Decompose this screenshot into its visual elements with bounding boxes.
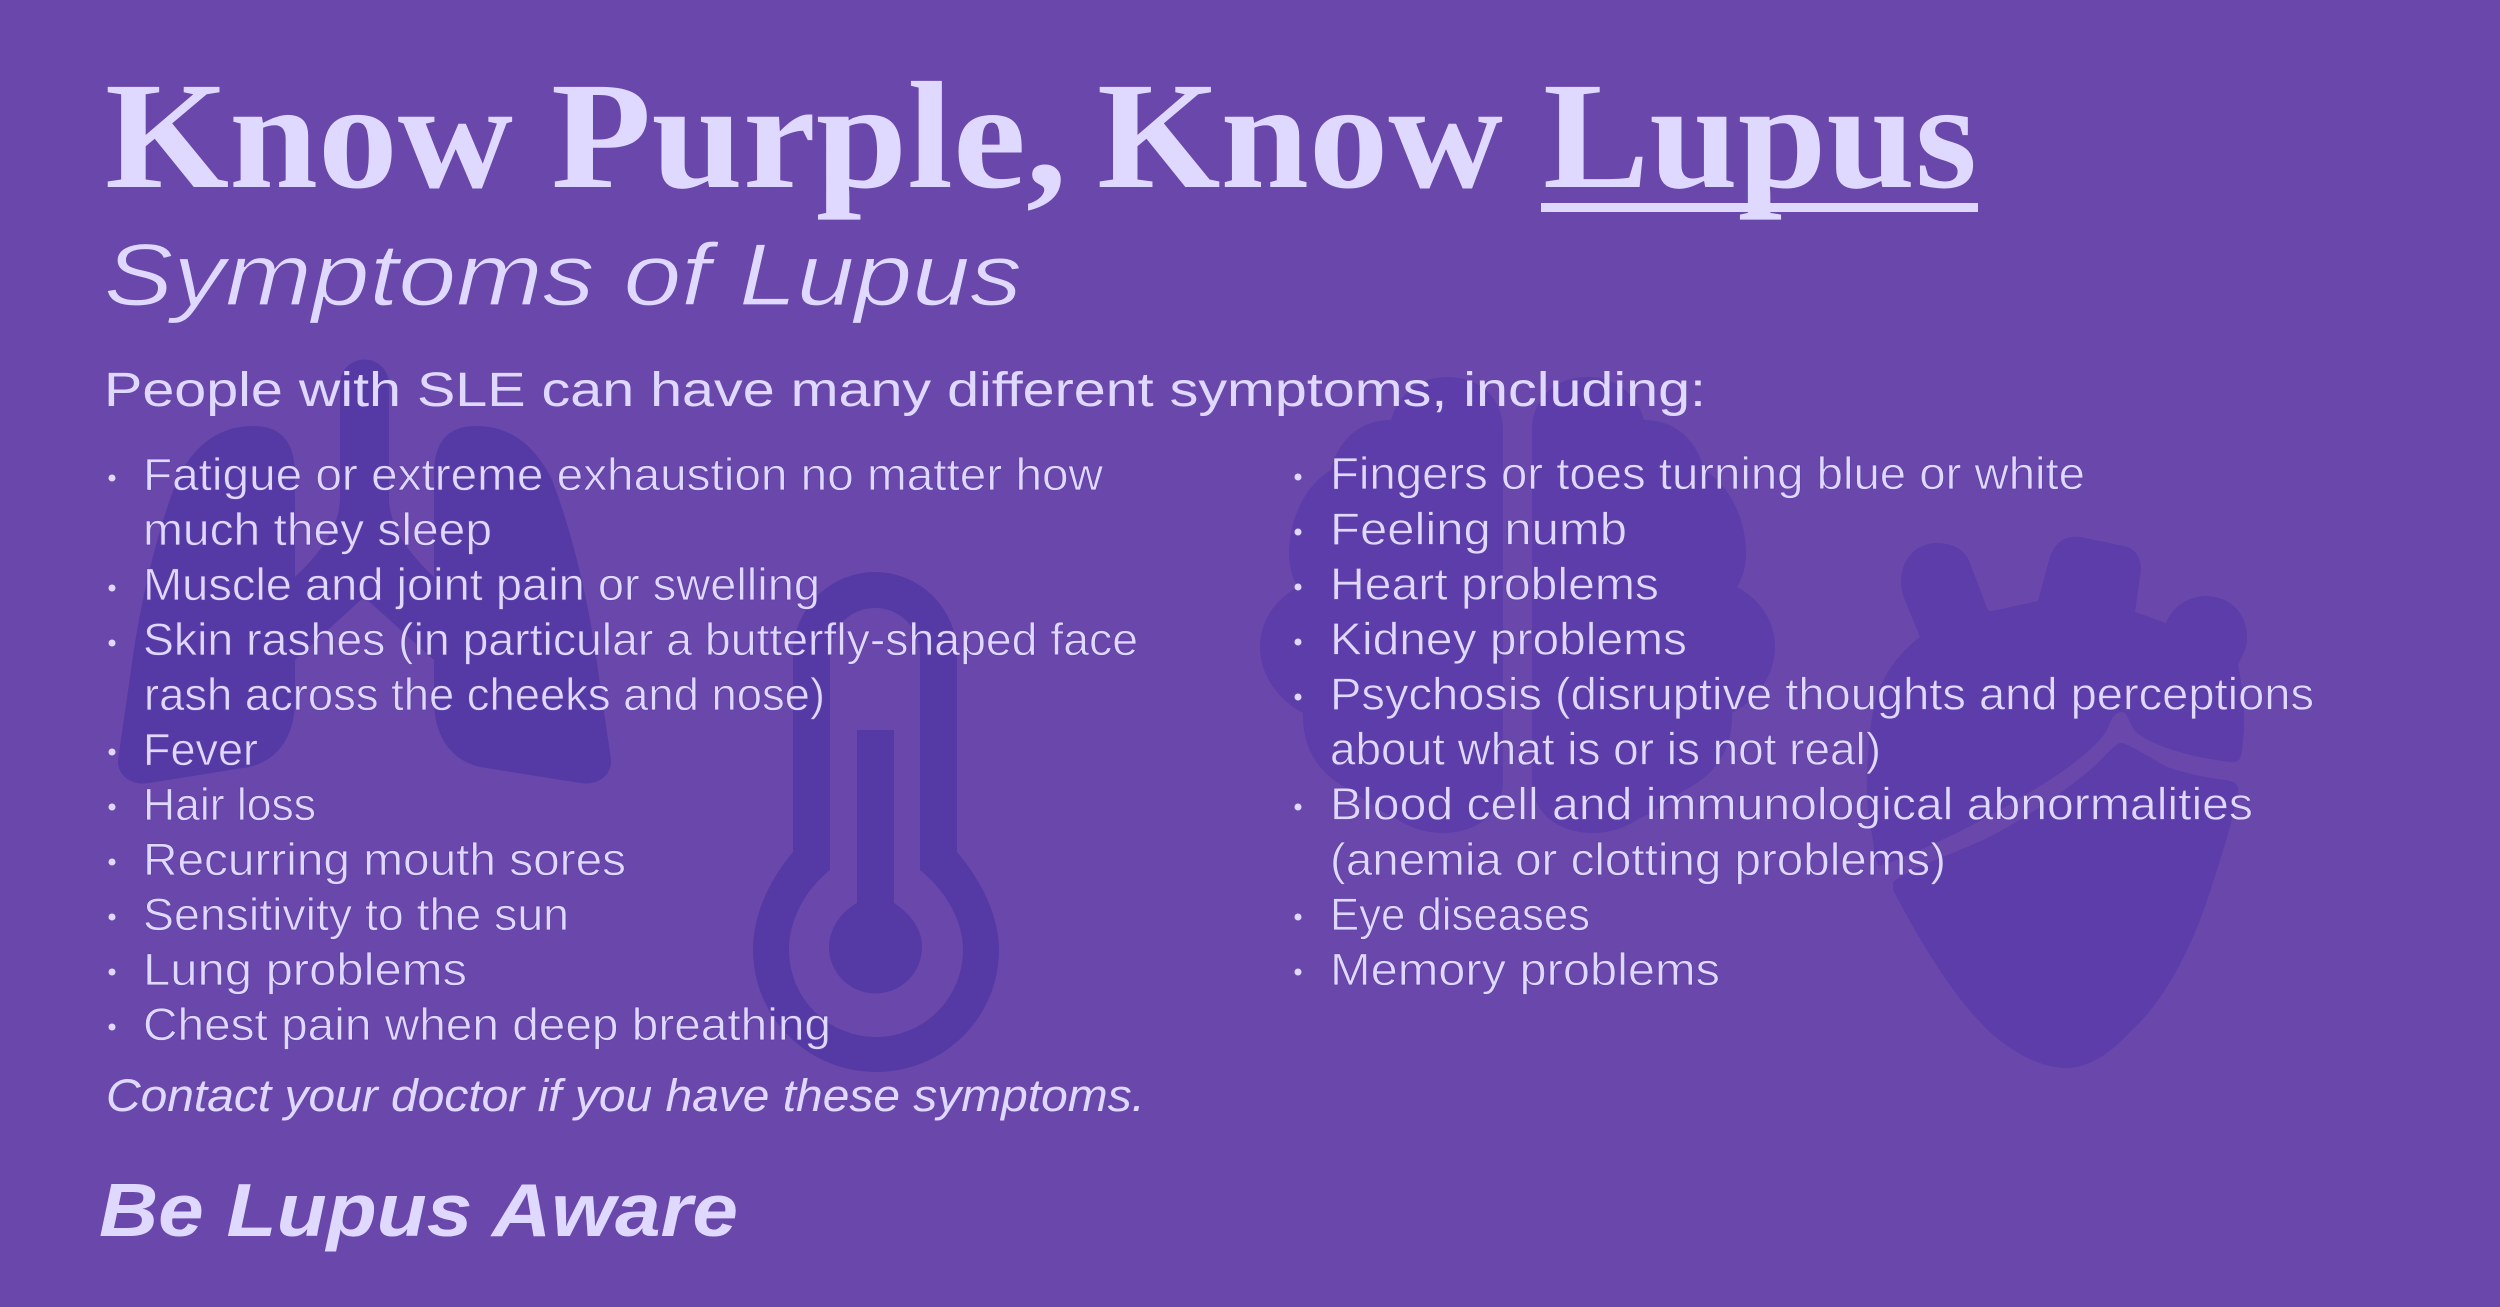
list item: mouth sores: Recurring mouth sores (143, 834, 626, 885)
list item: fatigue: much they sleep (143, 504, 492, 555)
list item: fatigue (108, 449, 1104, 555)
list item: skin rashes: rash across the cheeks and nose) (144, 669, 825, 720)
list item: lung problems: Lung problems (143, 944, 467, 995)
list item: blood cell: Blood cell and immunological abnormalities (1330, 778, 2253, 830)
icon: thermometer (753, 572, 999, 1072)
title: Purple, (551, 52, 1067, 221)
intro text: People with SLE can have many different symptoms, including: (104, 364, 1706, 417)
list item: psychosis: about what is or is not real) (1330, 724, 1881, 774)
list item: muscle pain: Muscle and joint pain or swelling (143, 559, 820, 610)
left symptom list (108, 449, 1138, 1050)
title: Know (1097, 52, 1503, 221)
subtitle: Symptoms of Lupus (104, 225, 1022, 324)
icon: heart (1867, 537, 2247, 1068)
tagline: Be Lupus Aware (99, 1168, 738, 1252)
title: Lupus (1543, 52, 1977, 221)
list item: psychosis: Psychosis (disruptive thoughts and perceptions (1330, 668, 2314, 720)
list item: blood cell (1294, 778, 2253, 885)
list item: eye diseases: Eye diseases (1330, 889, 1590, 940)
list item: chest pain: Chest pain when deep breathing (143, 999, 831, 1050)
list item: feeling numb: Feeling numb (1330, 504, 1627, 554)
list item: fever: Fever (143, 724, 258, 775)
right symptom list (1294, 448, 2314, 995)
list item: sun sensitivity: Sensitivity to the sun (143, 889, 569, 940)
list item: heart problems: Heart problems (1330, 558, 1659, 610)
list item: skin rashes (108, 614, 1138, 720)
icon: lungs (118, 360, 611, 783)
list item: psychosis (1294, 668, 2314, 774)
list item: fingers or toes: Fingers or toes turning blue or white (1330, 448, 2085, 499)
list item: hair loss: Hair loss (143, 779, 316, 830)
title (105, 52, 1978, 221)
list item: fatigue: Fatigue or extreme exhaustion no matter how (143, 449, 1104, 500)
title: Know (105, 52, 513, 221)
list item: skin rashes: Skin rashes (in particular a butterfly-shaped face (143, 614, 1138, 665)
icon: brain (1260, 377, 1775, 833)
list item: kidney problems: Kidney problems (1330, 614, 1687, 664)
call to action: Contact your doctor if you have these symptoms. (106, 1070, 1145, 1121)
list item: memory problems: Memory problems (1330, 944, 1720, 995)
list item: blood cell: (anemia or clotting problems) (1330, 834, 1946, 885)
